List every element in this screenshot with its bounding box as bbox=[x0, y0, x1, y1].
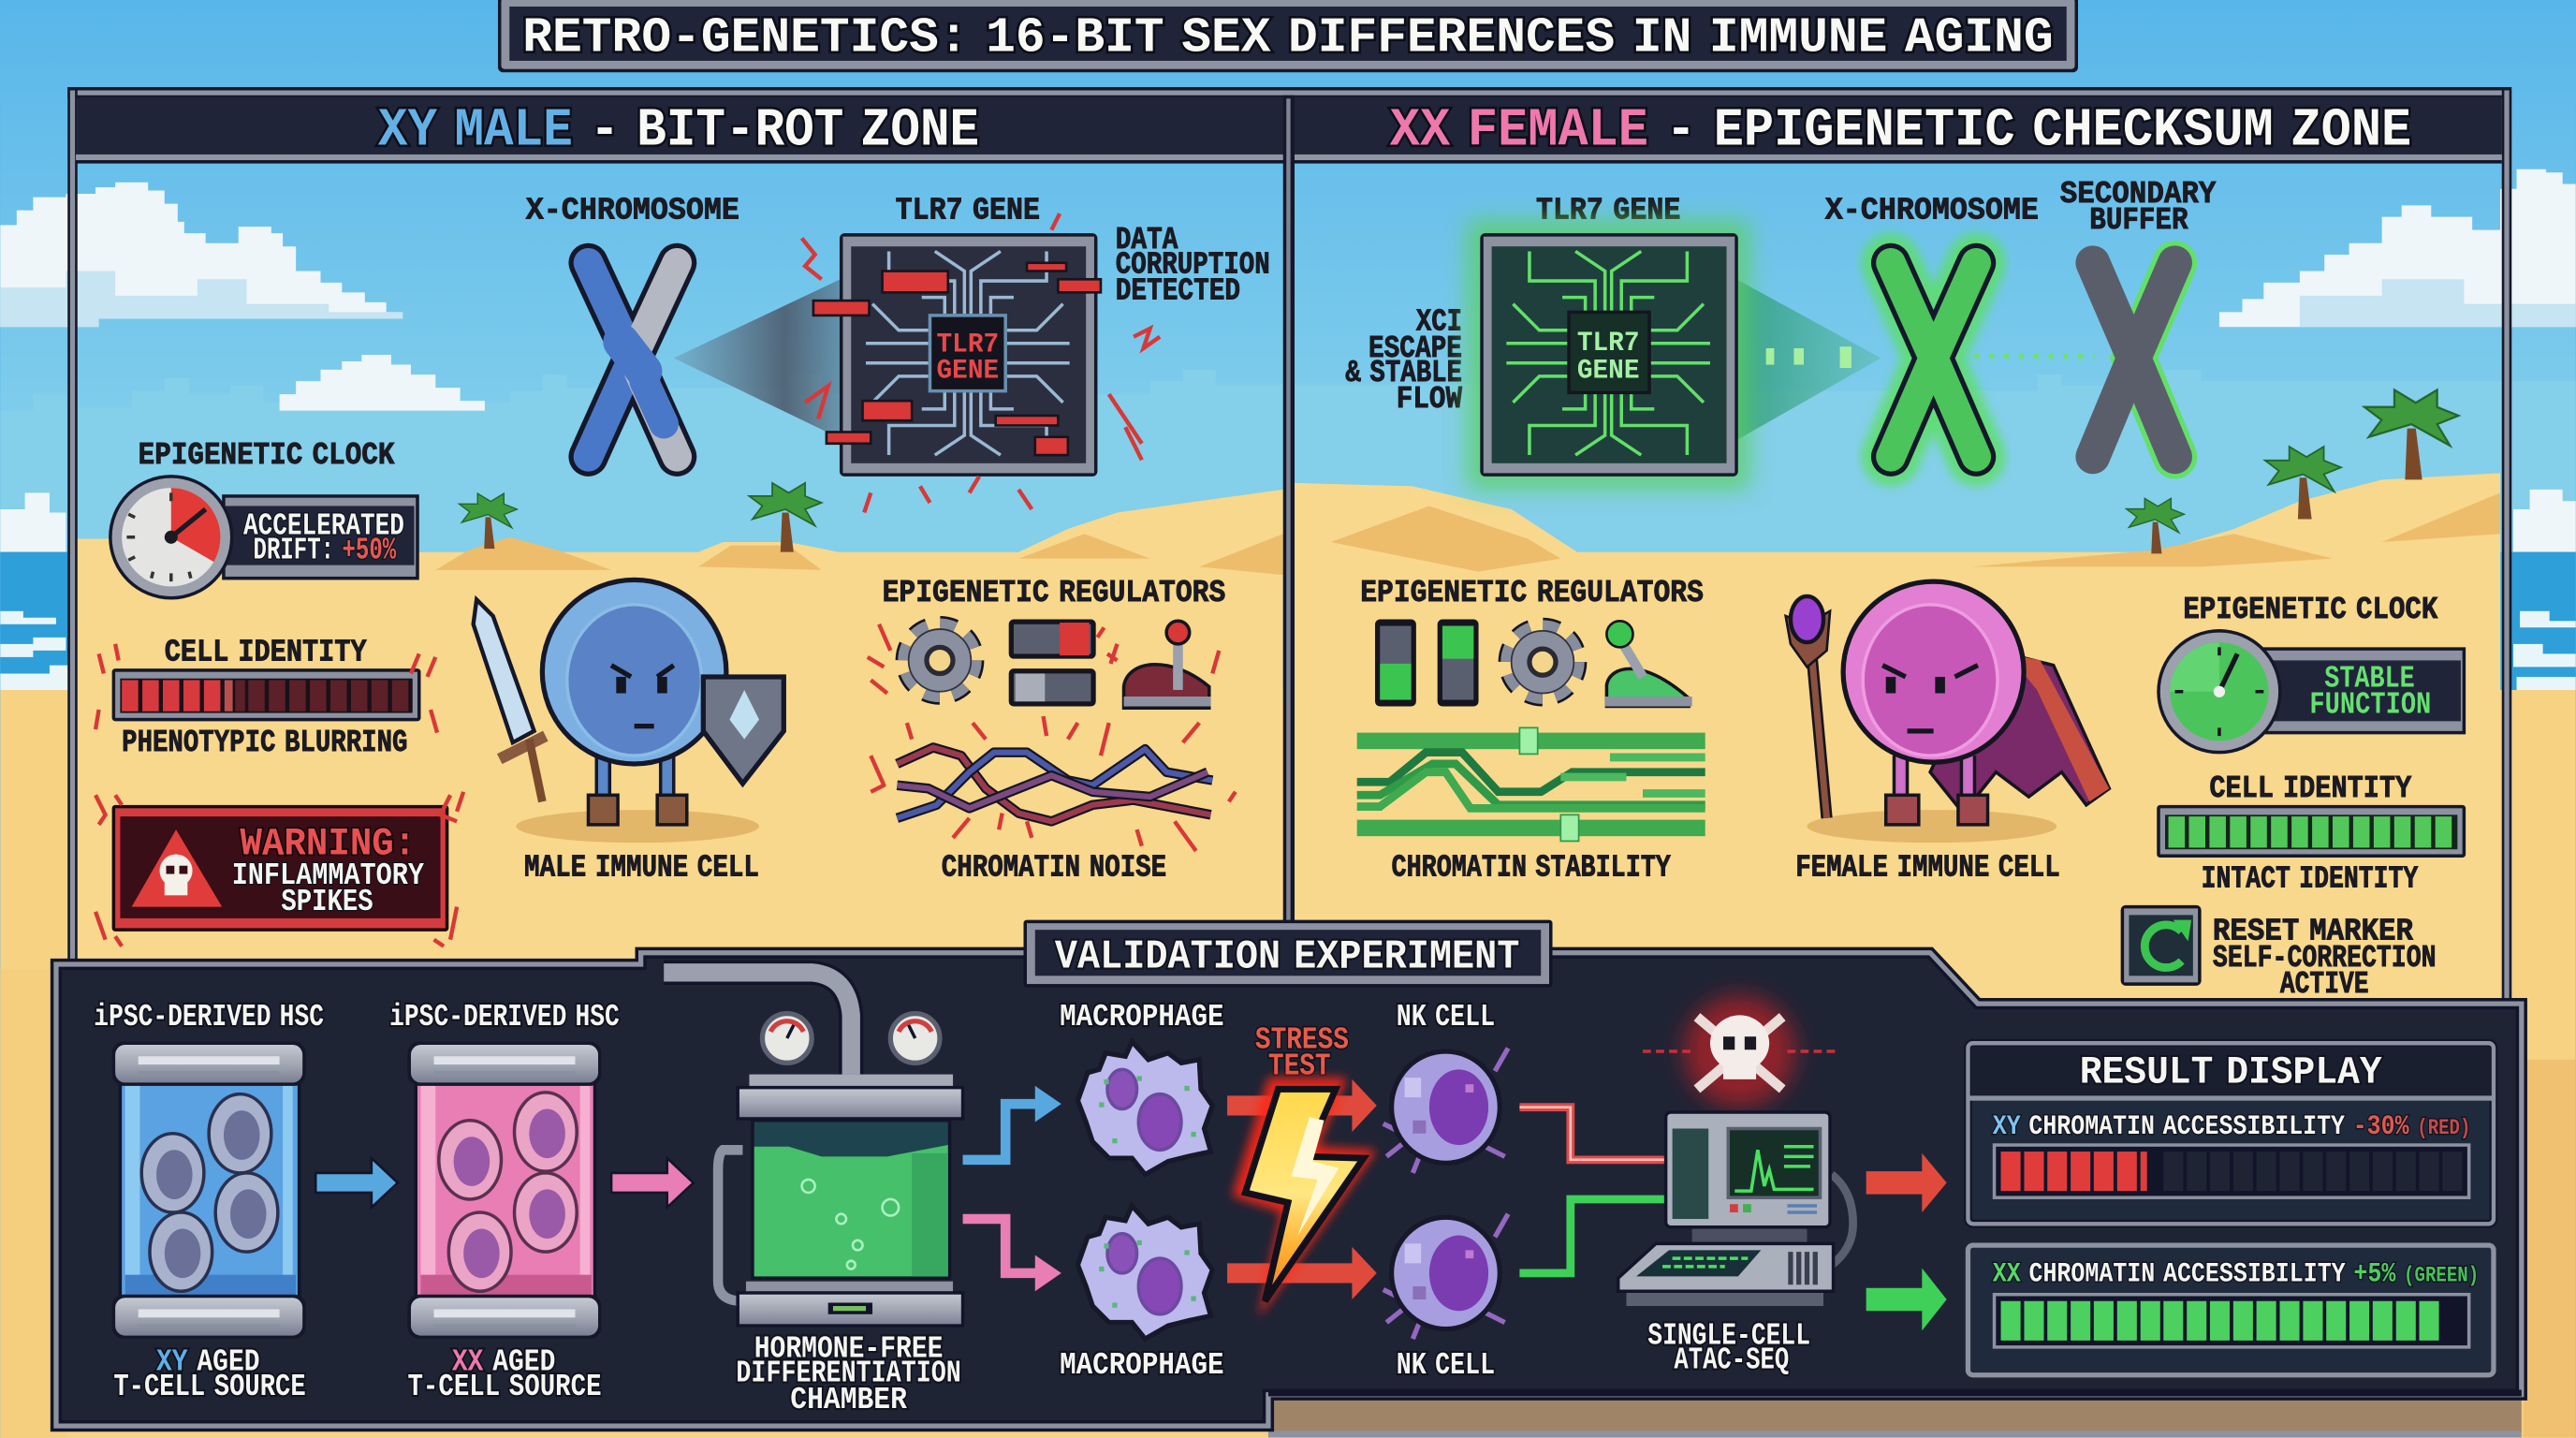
label: data corruption bbox=[1116, 223, 1270, 309]
icon: green chip: GENE bbox=[1577, 355, 1640, 387]
label: secondary buffer bbox=[2060, 177, 2216, 239]
beam: green bbox=[1519, 1189, 1693, 1273]
arrow: blue output bbox=[963, 1086, 1061, 1160]
label: macrophage bottom: MACROPHAGE bbox=[1060, 1348, 1224, 1384]
icon: xy jar bbox=[112, 1041, 306, 1339]
label: xy source: XY AGED bbox=[156, 1344, 260, 1380]
label: ipsc xy: iPSC-DERIVED HSC bbox=[94, 1000, 324, 1035]
icon: nk cell bottom bbox=[1383, 1214, 1508, 1339]
label: data corruption: DETECTED bbox=[1116, 273, 1240, 309]
label: tlr7 gene: TLR7 GENE bbox=[896, 193, 1040, 228]
arrow: pink bbox=[611, 1158, 694, 1208]
label: ipsc xx: iPSC-DERIVED HSC bbox=[389, 1000, 620, 1035]
label: xx accessibility: XX CHROMATIN ACCESSIBILITY +5% (GREEN) bbox=[1993, 1258, 2479, 1290]
label: cell identity: CELL IDENTITY bbox=[165, 635, 367, 670]
icon: reset marker bbox=[2121, 905, 2202, 986]
label: male immune cell: MALE IMMUNE CELL bbox=[524, 850, 759, 886]
arrow: stress bottom bbox=[1227, 1247, 1377, 1299]
callout: warning: INFLAMMATORY bbox=[232, 858, 424, 894]
result header bbox=[1968, 1043, 2494, 1224]
label: macrophage top: MACROPHAGE bbox=[1060, 1000, 1224, 1035]
label: xx source bbox=[407, 1344, 602, 1405]
callout: warning: WARNING: bbox=[240, 821, 416, 866]
label: chamber bbox=[736, 1331, 961, 1418]
result xx frame bbox=[1968, 1245, 2494, 1375]
label: chromatin stability: CHROMATIN STABILITY bbox=[1392, 850, 1671, 886]
label: atac-seq: SINGLE-CELL bbox=[1647, 1318, 1810, 1354]
chart: chromatin noise bbox=[871, 716, 1236, 851]
arrow: stress top bbox=[1227, 1079, 1377, 1132]
icons: female regulators bbox=[1375, 620, 1692, 707]
label: epigenetic regulators: EPIGENETIC REGULATORS bbox=[1360, 576, 1704, 611]
label: xci escape: ESCAPE bbox=[1368, 331, 1462, 367]
bar: xx accessibility bbox=[1995, 1295, 2469, 1347]
label: secondary buffer: BUFFER bbox=[2089, 203, 2188, 239]
label: chamber: DIFFERENTIATION bbox=[736, 1357, 961, 1392]
arrow: green result bbox=[1866, 1269, 1947, 1330]
label: xci escape bbox=[1345, 305, 1462, 418]
clock: accelerated drift bbox=[109, 475, 419, 599]
label: data corruption: DATA bbox=[1116, 223, 1178, 258]
arrow: blue bbox=[315, 1158, 398, 1208]
panel: male zone bbox=[95, 193, 1270, 946]
label: xx source: T-CELL SOURCE bbox=[407, 1370, 602, 1405]
label: atac-seq: ATAC-SEQ bbox=[1674, 1343, 1789, 1379]
label: phenotypic blurring: PHENOTYPIC BLURRING bbox=[122, 726, 407, 761]
clock: stable function bbox=[2157, 629, 2466, 754]
icon: macrophage top bbox=[1077, 1041, 1212, 1175]
icon: lightning bolt bbox=[1232, 1078, 1377, 1317]
result header: RESULT DISPLAY bbox=[2080, 1049, 2382, 1094]
icon: male x chromosome bbox=[588, 263, 677, 457]
label: xy accessibility: XY CHROMATIN ACCESSIBILITY -30% (RED) bbox=[1993, 1110, 2470, 1142]
label: reset marker bbox=[2213, 915, 2437, 1003]
icon: atac-seq computer bbox=[1618, 1112, 1853, 1306]
label: epigenetic regulators: EPIGENETIC REGULATORS bbox=[883, 576, 1225, 611]
label: xy source: T-CELL SOURCE bbox=[113, 1370, 306, 1405]
label: reset marker: RESET MARKER bbox=[2213, 915, 2413, 950]
bar: cell identity female bbox=[2157, 805, 2466, 858]
label: chamber: HORMONE-FREE bbox=[754, 1331, 944, 1367]
label: epigenetic clock: EPIGENETIC CLOCK bbox=[2183, 593, 2437, 628]
title: RETRO-GENETICS: 16-BIT SEX DIFFERENCES IN IMMUNE AGING bbox=[522, 9, 2054, 66]
label: xy source bbox=[113, 1344, 306, 1405]
icon: xx jar bbox=[407, 1041, 602, 1339]
icon: differentiation chamber bbox=[664, 973, 963, 1326]
beam: red bbox=[1519, 1108, 1693, 1169]
label: female immune cell: FEMALE IMMUNE CELL bbox=[1795, 850, 2060, 886]
label: reset marker: ACTIVE bbox=[2280, 967, 2369, 1003]
label: chromatin noise: CHROMATIN NOISE bbox=[942, 850, 1166, 886]
label: x-chromosome: X-CHROMOSOME bbox=[1825, 193, 2039, 228]
label: secondary buffer: SECONDARY bbox=[2060, 177, 2216, 213]
label: stress test bbox=[1255, 1023, 1349, 1085]
icon: secondary buffer chromosome bbox=[2093, 263, 2175, 457]
heading: female zone: XX FEMALE - EPIGENETIC CHECKSUM ZONE bbox=[1390, 100, 2411, 161]
icon: corrupted chip: GENE bbox=[936, 355, 999, 387]
label: xci escape: XCI bbox=[1416, 305, 1462, 341]
label: xci escape: FLOW bbox=[1397, 382, 1462, 418]
clock: accelerated drift: ACCELERATED bbox=[243, 508, 404, 544]
small palm trees bbox=[460, 390, 2458, 553]
label: x-chromosome: X-CHROMOSOME bbox=[526, 193, 739, 228]
label: cell identity: CELL IDENTITY bbox=[2209, 771, 2411, 807]
icon: skull and crossbones bbox=[1643, 995, 1840, 1108]
label: data corruption: CORRUPTION bbox=[1116, 247, 1270, 283]
bar: cell identity male bbox=[95, 644, 437, 733]
clock: stable function: FUNCTION bbox=[2309, 688, 2431, 724]
icons: male regulators bbox=[868, 620, 1219, 708]
character: female immune cell bbox=[1786, 581, 2109, 843]
label: nk cell bottom: NK CELL bbox=[1397, 1348, 1495, 1384]
panel: female zone bbox=[1345, 177, 2466, 1003]
beam: chromosome to chip bbox=[674, 271, 857, 447]
heading: validation experiment: VALIDATION EXPERIMENT bbox=[1055, 934, 1519, 981]
beam: chip to chromosome bbox=[1736, 279, 2095, 440]
icon: green chip: TLR7 bbox=[1577, 327, 1640, 359]
icon: corrupted chip: TLR7 bbox=[936, 329, 999, 360]
arrow: red result bbox=[1866, 1153, 1947, 1212]
label: reset marker: SELF-CORRECTION bbox=[2213, 941, 2437, 976]
label: xx source: XX AGED bbox=[452, 1344, 555, 1380]
panel: result display bbox=[1968, 1043, 2494, 1375]
label: intact identity: INTACT IDENTITY bbox=[2202, 862, 2418, 898]
icon: macrophage bottom bbox=[1077, 1206, 1212, 1339]
callout: warning bbox=[95, 792, 463, 946]
label: xci escape: & STABLE bbox=[1345, 356, 1462, 391]
callout: warning: SPIKES bbox=[281, 885, 373, 920]
heading: validation experiment bbox=[1023, 920, 1553, 988]
arrow: pink output bbox=[963, 1219, 1061, 1291]
label: epigenetic clock: EPIGENETIC CLOCK bbox=[139, 438, 394, 474]
clock: accelerated drift: DRIFT: +50% bbox=[254, 534, 397, 569]
icon: green chip bbox=[1467, 220, 1749, 490]
icon: nk cell top bbox=[1383, 1049, 1508, 1173]
chart: chromatin stability bbox=[1357, 727, 1705, 841]
character: male immune cell bbox=[474, 580, 783, 843]
label: stress test: STRESS bbox=[1255, 1023, 1349, 1059]
icon: green x chromosome bbox=[1891, 263, 1976, 457]
label: chamber: CHAMBER bbox=[790, 1383, 907, 1418]
icon: corrupted chip bbox=[802, 213, 1160, 512]
label: tlr7 gene: TLR7 GENE bbox=[1536, 193, 1680, 228]
panel: validation experiment bbox=[56, 920, 2522, 1437]
clock: stable function: STABLE bbox=[2324, 661, 2415, 697]
label: stress test: TEST bbox=[1268, 1049, 1331, 1085]
bar: xy accessibility bbox=[1995, 1145, 2469, 1197]
main frame bbox=[67, 87, 2511, 1015]
label: nk cell top: NK CELL bbox=[1397, 1000, 1495, 1035]
label: atac-seq bbox=[1647, 1318, 1810, 1379]
heading: male zone: XY MALE - BIT-ROT ZONE bbox=[378, 100, 979, 161]
